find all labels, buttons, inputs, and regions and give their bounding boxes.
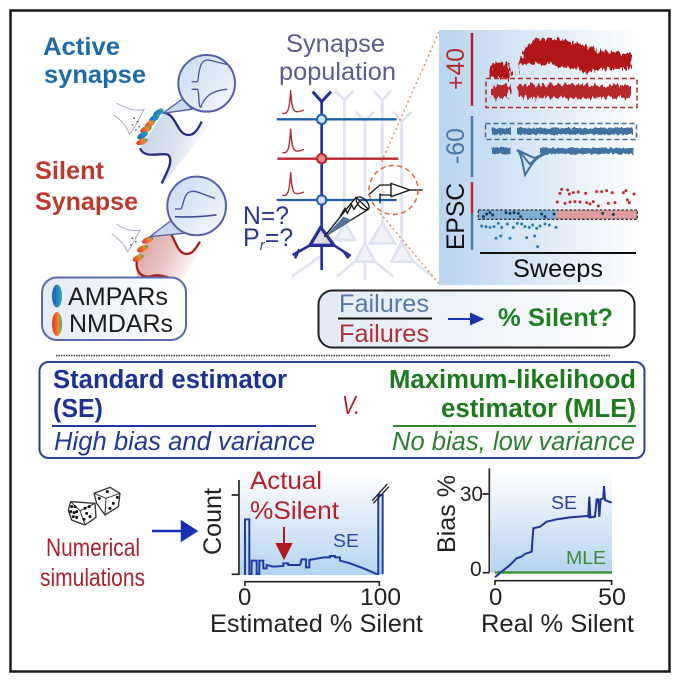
dashed box: +40 failures [486,78,637,108]
label: count: Count [199,488,227,555]
heading: synapse population: population [279,58,396,86]
tick labels [238,584,401,611]
underline: standard estimator [52,425,316,427]
label: N and Pr unknown: N=? [243,202,289,230]
divider [56,354,610,356]
chart background [240,472,383,575]
dotted zoom lines [380,32,440,285]
label: actual percent silent: %Silent [250,497,339,525]
tick labels: 100 [360,584,401,611]
dashed box: -60 failures [486,124,636,140]
icon: NMDAR [52,312,62,336]
chart background [491,470,612,573]
label: N and Pr unknown [243,202,293,254]
note: standard estimator: High bias and variance [54,428,315,456]
label: failures denominator: Failures [339,320,429,348]
panel: synapse population [243,30,440,285]
label: +40: +40 [442,48,470,90]
axes [232,480,379,586]
dashed circle: recording site [369,166,418,214]
panel: estimator comparison [40,362,644,458]
label: MLE: MLE [566,548,606,568]
label: versus: V. [342,392,360,420]
y tick labels: 0 [470,558,482,581]
panel: active and silent synapse [35,33,235,340]
tick labels: 0 [238,584,251,611]
heading: standard estimator [53,366,287,423]
legend: receptors [42,278,186,340]
arrow: actual value [277,527,291,558]
fraction bar [338,318,432,320]
icon: dice [68,487,120,525]
evoked EPSC dip [517,150,565,175]
underline: maximum-likelihood estimator [393,425,636,427]
line: MLE [495,571,612,574]
heading: maximum-likelihood estimator: Maximum-likelihood [389,366,636,394]
label: SE: SE [333,531,359,551]
icon: active recording bubble [163,55,235,113]
histogram: SE [245,495,383,575]
label: NMDARs: NMDARs [69,310,173,338]
label: N and Pr unknown: =? [265,224,293,252]
scale bars [471,33,473,250]
label: actual percent silent: Actual [250,467,322,495]
label: N and Pr unknown: P [243,224,260,252]
axis break [372,484,389,503]
chart: estimated percent silent histogram [199,467,423,638]
label: N and Pr unknown: r [260,237,266,254]
scatter plot [478,189,637,247]
label: bias percent: Bias % [433,475,461,553]
neuron with synaptic inputs [277,90,398,270]
icon: AMPAR [52,284,62,308]
note: maximum-likelihood estimator: No bias, low variance [392,428,635,456]
label: numerical simulations [40,534,145,592]
axes [483,468,612,585]
heading: maximum-likelihood estimator [389,366,636,423]
x tick labels: 50 [598,584,626,611]
heading: standard estimator: Standard estimator [53,366,287,394]
heading: silent synapse: Silent [35,157,105,185]
heading: maximum-likelihood estimator: estimator (MLE) [441,395,636,423]
chart: bias versus real percent silent [433,468,634,638]
heading: silent synapse [35,157,138,216]
heading: active synapse [43,33,146,89]
x tick labels [489,584,626,611]
heading: active synapse: synapse [44,61,146,89]
panel: recordings [439,30,641,285]
label: failures numerator: Failures [339,290,429,318]
label: EPSC: EPSC [442,183,470,250]
label: numerical simulations: simulations [40,564,145,592]
panel: failures ratio [318,290,634,348]
label: estimated percent silent: Estimated % Silent [210,610,423,638]
arrow: simulations to histogram [152,522,196,540]
icon: patch pipette and amplifier [324,183,423,237]
y tick labels: 30 [460,483,483,506]
illustration: active spine [113,103,208,187]
ghost neurons [292,91,433,280]
label: SE: SE [551,493,577,513]
heading: synapse population [279,30,396,86]
label: real percent silent: Real % Silent [481,610,634,638]
x tick labels: 0 [489,584,502,611]
x axis line [480,252,636,254]
heading: standard estimator: (SE) [53,395,103,423]
heading: silent synapse: Synapse [35,188,138,216]
label: numerical simulations: Numerical [46,534,140,562]
traces: -60 mV [492,128,633,154]
panel background [439,30,641,285]
arrow: to percent silent [448,314,482,324]
line: SE [495,486,612,577]
icon: silent recording bubble [150,177,226,237]
label: sweeps: Sweeps [513,255,603,283]
traces: +40 mV [491,39,631,98]
heading: active synapse: Active [43,33,120,61]
label: actual percent silent [250,467,339,525]
label: AMPARs: AMPARs [68,283,168,311]
y tick labels [460,483,483,581]
heading: synapse population: Synapse [286,30,385,58]
label: -60: -60 [442,128,470,164]
illustration: silent spine [112,224,205,280]
label: percent silent: % Silent? [498,304,613,332]
